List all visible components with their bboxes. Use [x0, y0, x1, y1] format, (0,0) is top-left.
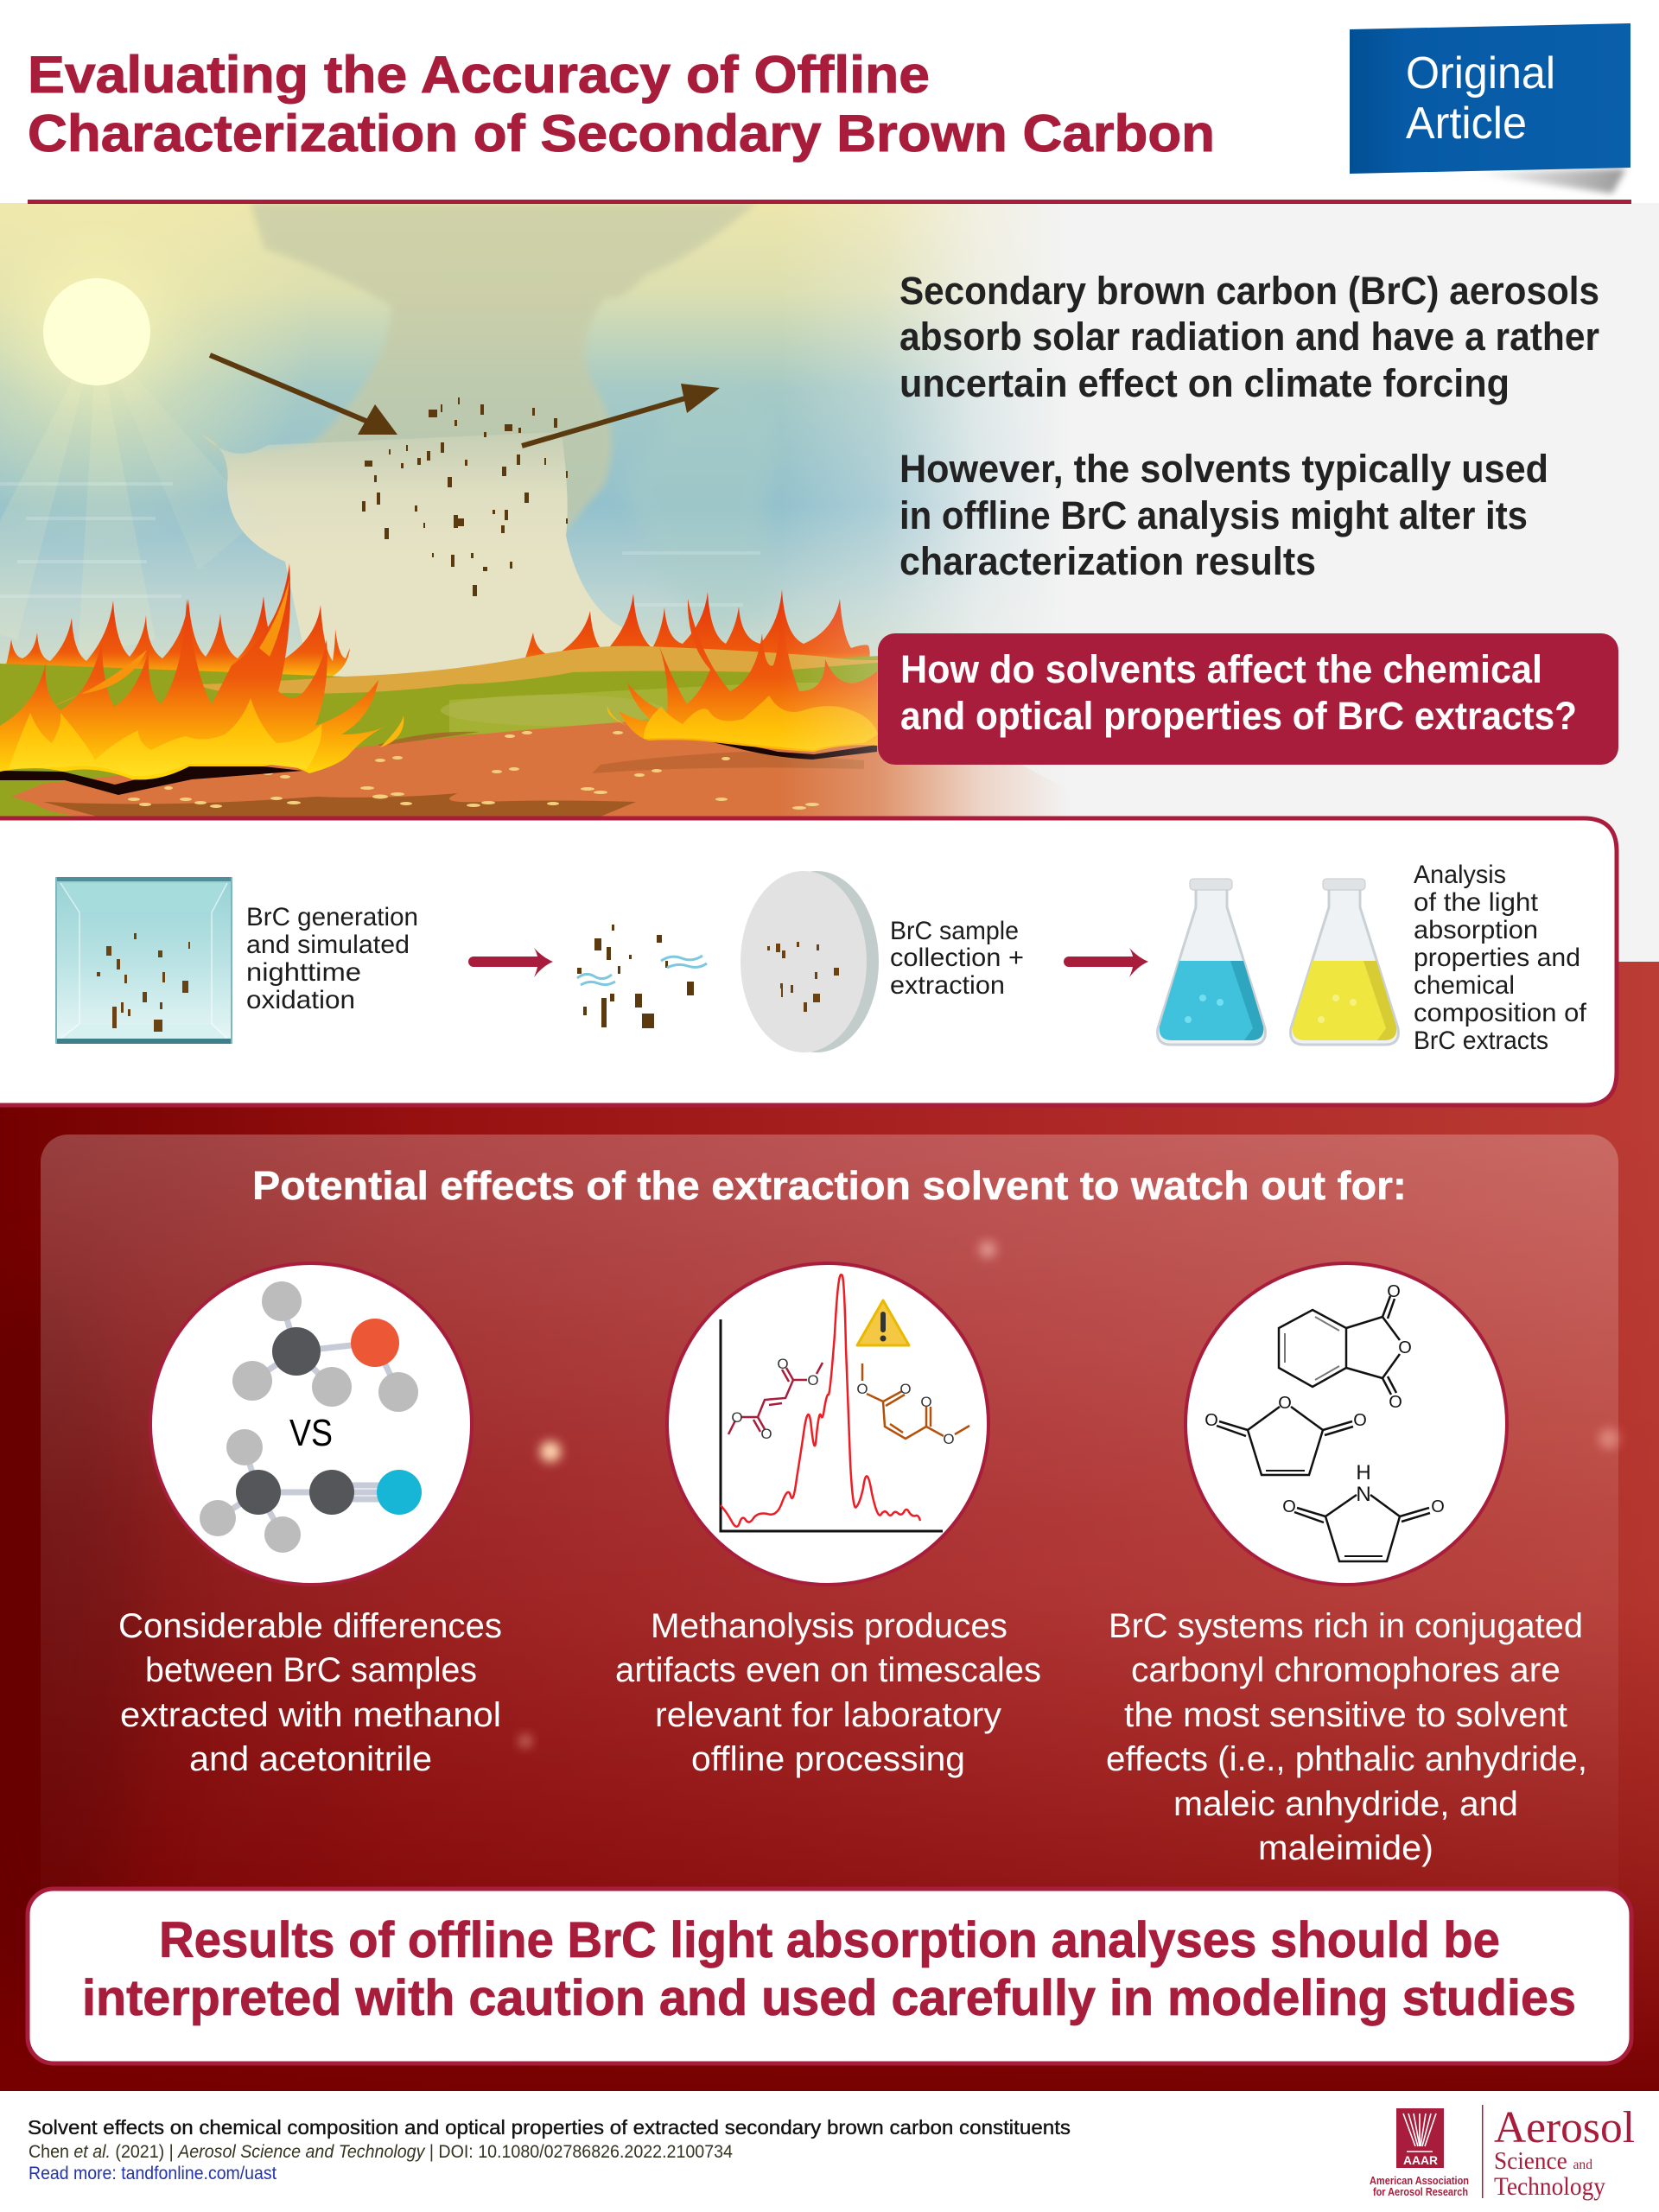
title: Characterization of Secondary Brown Carbon	[28, 105, 1215, 162]
icon: yellow flask	[1291, 879, 1398, 1045]
conclusion box	[28, 1889, 1631, 2063]
circle: methanolysis spectrum: O	[856, 1381, 868, 1397]
smoke plume	[0, 203, 778, 683]
circle: carbonyl chromophores: O	[1387, 1282, 1401, 1301]
ground cracks	[0, 741, 877, 795]
circle: carbonyl chromophores: O	[1282, 1497, 1296, 1516]
intro text: absorb solar radiation and have a rather	[899, 315, 1599, 359]
question callout: How do solvents affect the chemical	[900, 647, 1542, 691]
hero fade	[793, 204, 1123, 816]
circle: carbonyl chromophores: H	[1356, 1461, 1371, 1484]
text: step 1	[246, 903, 418, 1014]
circle: carbonyl chromophores: O	[1398, 1338, 1412, 1357]
arrow: scattered sunlight	[522, 384, 720, 446]
footer citation: Read more: tandfonline.com/uast	[29, 2164, 276, 2183]
text: effect 1: between BrC samples	[145, 1651, 477, 1689]
logo: AAAR: AAAR	[1403, 2153, 1438, 2167]
text: step 3	[1414, 861, 1587, 1055]
circle: carbonyl chromophores: O	[1431, 1497, 1445, 1516]
text: step 1: nighttime	[246, 958, 361, 987]
text: step 3: composition of	[1414, 999, 1587, 1027]
panel heading: Potential effects of the extraction solvent to watch out for:	[252, 1163, 1407, 1208]
text: effect 3: BrC systems rich in conjugated	[1109, 1607, 1583, 1645]
intro text: uncertain effect on climate forcing	[899, 361, 1510, 405]
icon: smog chamber	[55, 877, 232, 1044]
logo: AAAR	[1370, 2108, 1469, 2198]
text: step 2	[890, 917, 1024, 1000]
text: step 3: BrC extracts	[1414, 1027, 1548, 1055]
text: step 3: properties and	[1414, 944, 1580, 972]
footer citation	[0, 2091, 1659, 2212]
text: effect 3: carbonyl chromophores are	[1131, 1651, 1560, 1689]
circle: carbonyl chromophores: O	[1205, 1411, 1218, 1430]
text: effect 3: the most sensitive to solvent	[1124, 1696, 1567, 1734]
logo: Aerosol Science and Technology: Science and	[1494, 2148, 1592, 2175]
text: step 3: of the light	[1414, 888, 1539, 917]
ground: tan hill	[198, 646, 950, 694]
text: effect 2: offline processing	[691, 1740, 965, 1778]
circle: carbonyl chromophores	[1185, 1263, 1507, 1585]
panel: process workflow	[0, 818, 1617, 1105]
ground: green	[0, 656, 878, 816]
back flames left	[3, 596, 350, 678]
circle: methanolysis spectrum: O	[899, 1381, 912, 1397]
text: effect 1: and acetonitrile	[189, 1740, 432, 1778]
front flame left	[0, 563, 390, 779]
text: effect 3: maleic anhydride, and	[1173, 1785, 1518, 1823]
text: step 1: oxidation	[246, 986, 355, 1014]
circle: methanol vs acetonitrile: VS	[289, 1412, 333, 1454]
arrow: step 1 to 2	[468, 948, 553, 977]
text: effect 2	[615, 1607, 1041, 1778]
circle: methanolysis spectrum: O	[731, 1409, 743, 1426]
ground: dirt pebbles	[80, 731, 819, 810]
conclusion box: Results of offline BrC light absorption analyses should be	[159, 1912, 1500, 1968]
footer citation: Chen et al. (2021) | Aerosol Science and Technology | DOI: 10.1080/02786826.2022.2100734	[29, 2142, 733, 2162]
intro text: characterization results	[899, 539, 1316, 583]
intro text	[899, 269, 1599, 583]
particle cloud	[362, 397, 568, 596]
badge: Original Article: Original	[1406, 48, 1555, 99]
circle: methanolysis spectrum: O	[943, 1431, 955, 1447]
circle: methanolysis spectrum: O	[807, 1372, 819, 1389]
logo: Aerosol Science and Technology: Aerosol	[1494, 2103, 1635, 2152]
title: Evaluating the Accuracy of Offline	[28, 46, 930, 104]
text: effect 3	[1106, 1607, 1587, 1867]
text: step 3: Analysis	[1414, 861, 1506, 889]
question callout: and optical properties of BrC extracts?	[900, 694, 1577, 738]
text: effect 1	[118, 1607, 502, 1778]
circle: carbonyl chromophores: N	[1356, 1483, 1371, 1506]
text: step 2: collection +	[890, 944, 1024, 972]
intro text: However, the solvents typically used	[899, 447, 1548, 491]
badge: Original Article	[1350, 23, 1630, 194]
rule under header	[28, 200, 1631, 204]
circle: methanolysis spectrum: O	[760, 1426, 772, 1442]
question callout	[878, 633, 1618, 765]
icon: filter disc	[741, 871, 879, 1052]
text: step 2: BrC sample	[890, 917, 1019, 945]
circle: methanolysis spectrum	[667, 1263, 988, 1585]
circle: carbonyl chromophores: O	[1278, 1394, 1292, 1413]
circle: methanol vs acetonitrile	[150, 1263, 472, 1585]
badge: Original Article: Article	[1406, 99, 1527, 149]
ground: orange dirt	[11, 721, 1123, 818]
circle: carbonyl chromophores: O	[1353, 1411, 1367, 1430]
text: effect 3: effects (i.e., phthalic anhydride,	[1106, 1740, 1587, 1778]
text: step 3: absorption	[1414, 916, 1538, 944]
text: step 2: extraction	[890, 971, 1005, 1000]
conclusion box: interpreted with caution and used carefully in modeling studies	[82, 1970, 1576, 2026]
arrow: incoming sunlight	[210, 355, 397, 435]
logo: Aerosol Science and Technology	[1482, 2103, 1635, 2201]
text: effect 1: extracted with methanol	[120, 1696, 501, 1734]
back flames right	[525, 589, 870, 658]
sun	[0, 238, 278, 617]
circle: methanolysis spectrum: O	[920, 1394, 932, 1410]
circle: methanolysis spectrum: O	[777, 1356, 789, 1372]
logo: Aerosol Science and Technology: Technology	[1494, 2172, 1605, 2201]
text: effect 2: relevant for laboratory	[655, 1696, 1001, 1734]
icon: particles with solvent	[577, 925, 707, 1028]
icon: blue flask	[1158, 879, 1265, 1045]
title	[28, 46, 1215, 162]
footer citation: Solvent effects on chemical composition and optical properties of extracted secondary brown carbon constituents	[28, 2116, 1071, 2139]
intro text: in offline BrC analysis might alter its	[899, 493, 1528, 537]
text: effect 3: maleimide)	[1258, 1829, 1433, 1867]
red textured background	[0, 962, 1659, 2091]
text: effect 1: Considerable differences	[118, 1607, 502, 1645]
logo: AAAR: for Aerosol Research	[1373, 2186, 1468, 2198]
text: step 1: BrC generation	[246, 903, 418, 931]
text: step 3: chemical	[1414, 971, 1515, 1000]
arrow: step 2 to 3	[1064, 948, 1148, 977]
text: step 1: and simulated	[246, 931, 410, 959]
panel: potential effects	[41, 1135, 1618, 1929]
circle: carbonyl chromophores: O	[1389, 1393, 1402, 1412]
text: effect 2: Methanolysis produces	[651, 1607, 1007, 1645]
text: effect 2: artifacts even on timescales	[615, 1651, 1041, 1689]
hero illustration: wildfire landscape	[0, 203, 1054, 816]
front flame right	[619, 590, 878, 752]
intro text: Secondary brown carbon (BrC) aerosols	[899, 269, 1599, 313]
logo: AAAR: American Association	[1370, 2175, 1469, 2187]
